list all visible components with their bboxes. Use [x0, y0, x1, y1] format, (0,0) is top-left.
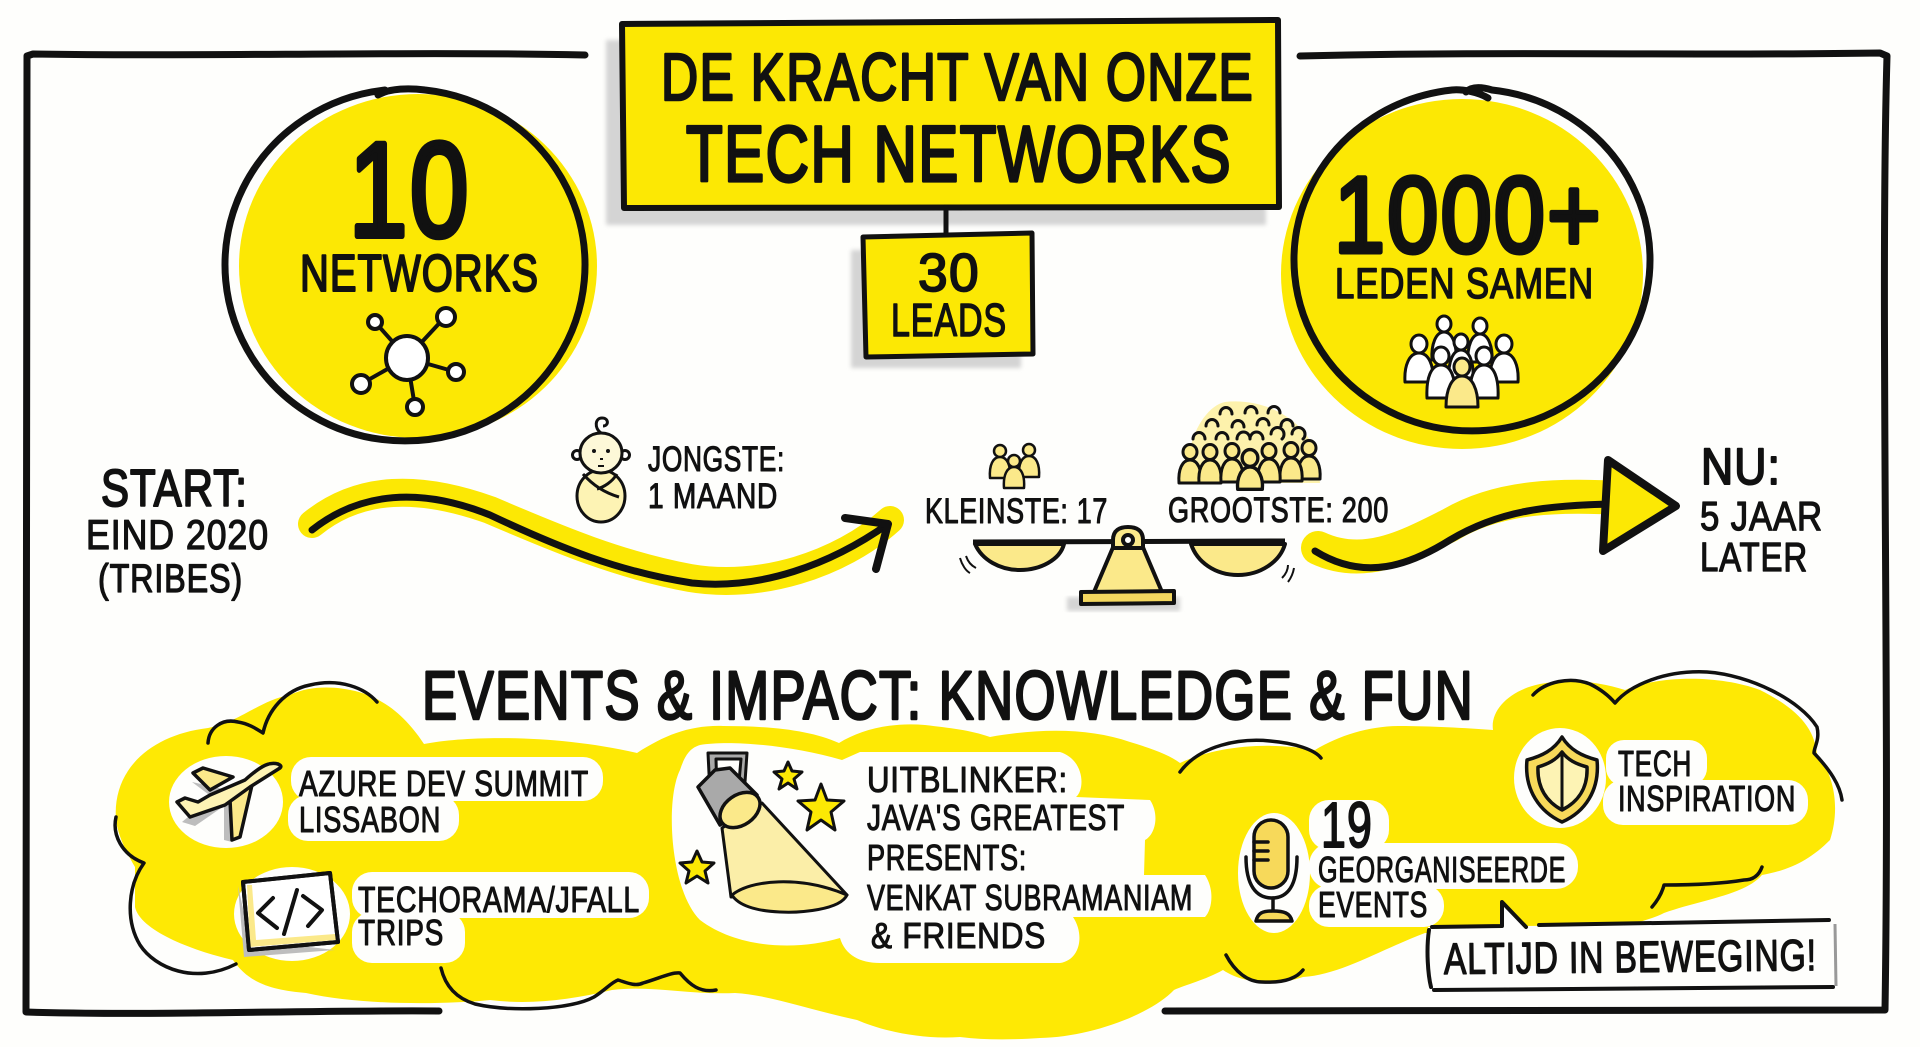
azure summit text: AZURE DEV SUMMIT — [299, 763, 589, 804]
events text: EVENTS — [1318, 884, 1428, 925]
white blobs behind event items — [169, 728, 1808, 963]
friends text: & FRIENDS — [871, 915, 1046, 956]
big number 1000+: 1000+ — [1334, 154, 1603, 275]
icon: network nodes — [352, 308, 464, 415]
members label: LEDEN SAMEN — [1335, 260, 1594, 308]
leads count: 30 — [918, 243, 980, 303]
title line 2: TECH NETWORKS — [686, 109, 1232, 198]
callout text: ALTIJD IN BEWEGING! — [1444, 931, 1817, 984]
inspiration text: INSPIRATION — [1618, 778, 1796, 819]
now value line 1: 5 JAAR — [1700, 493, 1823, 539]
connector title to leads — [944, 207, 948, 237]
organised text: GEORGANISEERDE — [1318, 849, 1566, 890]
start label — [86, 460, 269, 601]
leads label: LEADS — [891, 294, 1007, 346]
icon: balance scale — [960, 527, 1294, 611]
start label: START: — [101, 460, 248, 518]
networks label: NETWORKS — [300, 245, 539, 303]
now value line 2: LATER — [1700, 534, 1808, 580]
arrow: middle to now — [1315, 460, 1676, 568]
arrow: start to middle — [312, 493, 890, 584]
heading: events and impact: EVENTS & IMPACT: KNOWLEDGE & FUN — [422, 657, 1474, 734]
smallest network label: KLEINSTE: 17 — [925, 492, 1108, 531]
big number 10: 10 — [349, 116, 471, 265]
java greatest text: JAVA'S GREATEST — [867, 797, 1125, 838]
venkat text: VENKAT SUBRAMANIAM — [867, 877, 1193, 918]
panel: 10 networks circle — [225, 89, 597, 441]
tech text: TECH — [1618, 743, 1692, 784]
icon: group of members — [1405, 316, 1518, 407]
techorama text: TECHORAMA/JFALL — [358, 879, 640, 920]
icon: small group — [990, 444, 1039, 488]
highlight text: UITBLINKER: — [867, 759, 1068, 800]
trips text: TRIPS — [358, 912, 444, 953]
leads box — [851, 233, 1033, 368]
panel: events cloud — [115, 672, 1842, 1039]
count 19: 19 — [1321, 789, 1373, 861]
now label: NU: — [1701, 438, 1781, 495]
icon: large crowd — [1179, 401, 1320, 489]
icon: microphone — [1246, 820, 1297, 921]
largest network label: GROOTSTE: 200 — [1168, 491, 1389, 530]
now label — [1700, 438, 1823, 580]
start tribes: (TRIBES) — [98, 557, 243, 601]
presents text: PRESENTS: — [867, 837, 1027, 878]
cloud outline strokes — [115, 672, 1842, 1009]
title banner — [606, 20, 1279, 225]
youngest value: 1 MAAND — [648, 477, 778, 516]
panel: 1000+ members circle — [1281, 88, 1650, 449]
lisbon text: LISSABON — [299, 799, 441, 840]
callout: always in motion — [1428, 902, 1836, 990]
icon: spotlight with stars — [680, 753, 847, 912]
icon: code window — [238, 873, 338, 957]
title line 1: DE KRACHT VAN ONZE — [661, 40, 1254, 115]
icon: shield — [1527, 737, 1597, 822]
icon: airplane — [177, 763, 281, 842]
icon: baby — [572, 418, 630, 522]
start date: EIND 2020 — [86, 511, 269, 558]
youngest label: JONGSTE: — [648, 440, 785, 479]
youngest label — [648, 440, 785, 516]
